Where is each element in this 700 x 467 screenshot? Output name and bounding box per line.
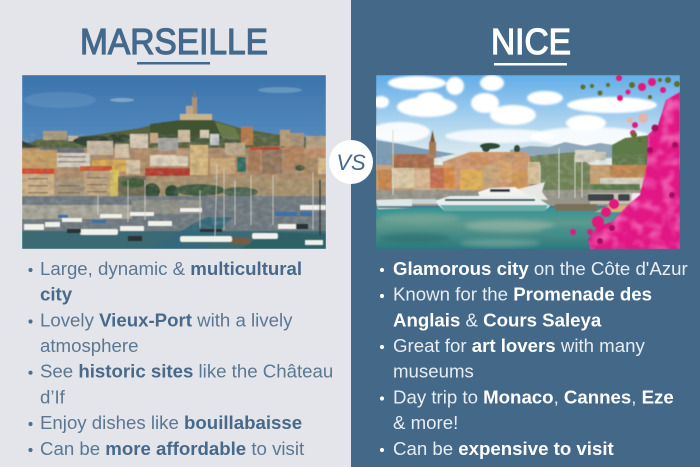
heading underline [137, 62, 210, 64]
list: Marseille highlights: d’If [40, 386, 66, 407]
bougainvillea flowers [570, 75, 680, 250]
list: Nice highlights: museums [393, 361, 474, 382]
list: Marseille highlights: See historic sites like the Château [40, 361, 333, 382]
town texture [22, 134, 326, 230]
list: Marseille highlights [28, 258, 333, 459]
yacht [434, 182, 550, 211]
heading underline [494, 63, 567, 66]
list: Marseille highlights: atmosphere [40, 335, 138, 356]
list: Nice highlights: Day trip to Monaco, Cannes, Eze [393, 386, 674, 407]
list: Marseille highlights: Can be more affordable to visit [40, 438, 305, 459]
list: Nice highlights: Great for art lovers with many [393, 335, 645, 356]
list: Marseille highlights: city [40, 284, 73, 305]
list: Nice highlights: Known for the Promenade des [393, 284, 652, 305]
heading: Marseille: MARSEILLE [80, 21, 268, 62]
list: Nice highlights: & more! [393, 412, 458, 433]
VS badge: VS [336, 150, 366, 175]
list: Nice highlights [380, 258, 688, 459]
panel: marseille [22, 28, 326, 249]
VS badge [329, 140, 373, 184]
list: Marseille highlights: Lovely Vieux-Port with a lively [40, 309, 293, 330]
list: Nice highlights: Anglais & Cours Saleya [393, 309, 602, 330]
bullet points [28, 268, 33, 452]
list: Nice highlights: Glamorous city on the Côte d'Azur [393, 258, 688, 279]
photo: Marseille harbour [22, 75, 326, 249]
water reflections [379, 213, 610, 247]
town texture [376, 154, 646, 200]
list: Marseille highlights: Enjoy dishes like bouillabaisse [40, 412, 302, 433]
photo: Nice harbour with bougainvillea [370, 75, 680, 250]
list: Marseille highlights: Large, dynamic & multicultural [40, 258, 302, 279]
list: Nice highlights: Can be expensive to visit [393, 438, 614, 459]
panel: nice [351, 0, 700, 467]
heading: Nice: NICE [491, 21, 571, 62]
clouds [370, 75, 657, 147]
bullet points [380, 268, 384, 452]
